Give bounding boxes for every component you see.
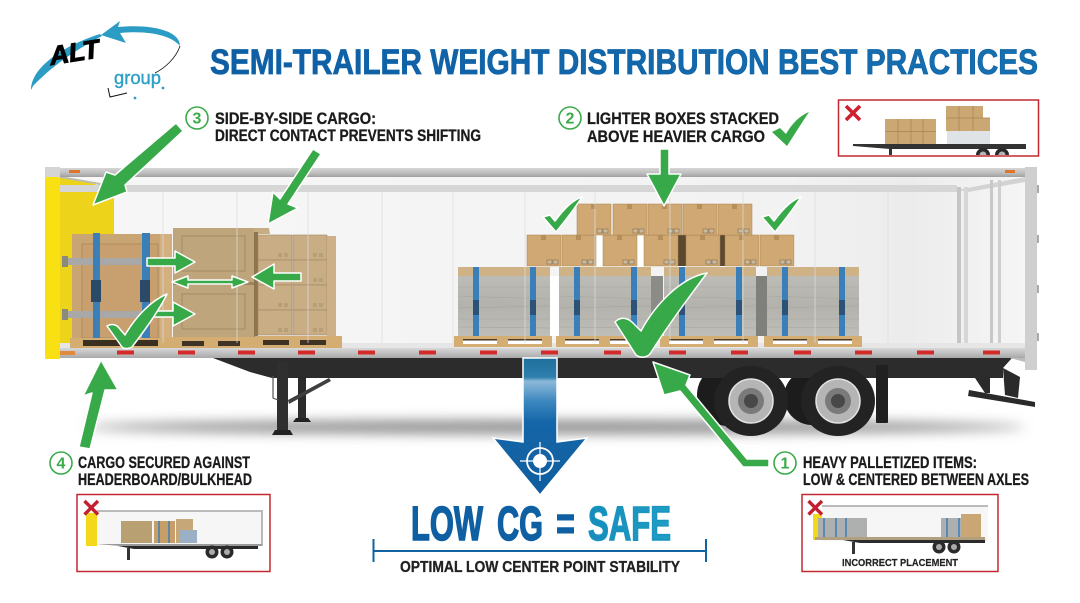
inset: incorrect placement, cargo off bulkhead	[77, 494, 270, 572]
logo: ALT group: group	[114, 68, 161, 88]
arrow: to upper boxes	[647, 149, 681, 206]
landing gear	[272, 362, 331, 435]
logo: ALT group: ALT	[46, 33, 103, 71]
callout 1: heavy palletized items	[774, 452, 1029, 489]
icon: target crosshair	[520, 442, 560, 481]
rear hidden wheels	[697, 364, 840, 426]
inset: incorrect flatbed loading	[838, 100, 1038, 156]
callout 2: lighter boxes	[559, 107, 779, 146]
icon: red X	[808, 501, 822, 514]
trailer deck with marker lights	[60, 343, 1025, 362]
callout 3: side-by-side cargo: DIRECT CONTACT PREVENTS SHIFTING	[215, 127, 481, 145]
icon: red X	[846, 106, 860, 120]
arrow: to headerboard from callout 4	[79, 360, 118, 449]
trailer dark chassis	[213, 358, 1012, 378]
trailer roof rails	[60, 168, 1025, 192]
left cargo: large cartons	[172, 228, 270, 348]
check: callout 2	[772, 112, 809, 146]
trailer interior wall	[60, 177, 1025, 347]
callout 2: lighter boxes: 2	[566, 110, 575, 128]
callout: low CG = safe: =	[556, 498, 575, 551]
callout: low CG = safe: CG	[497, 498, 543, 551]
left cargo: small carton stack	[255, 235, 342, 348]
bulkhead: yellow headerboard	[45, 167, 114, 359]
right cargo: heavy palletized blocks	[454, 267, 862, 347]
callout 2: lighter boxes: LIGHTER BOXES STACKED	[587, 110, 779, 128]
inset: incorrect placement, weight at ends: INCORRECT PLACEMENT	[842, 557, 959, 569]
rear support stand	[968, 368, 1035, 407]
ground shadow	[85, 420, 1025, 434]
arrow: low center of gravity	[493, 358, 587, 495]
callout 4: cargo secured: HEADERBOARD/BULKHEAD	[78, 471, 252, 489]
check: upper boxes left	[543, 197, 582, 232]
callout 4: cargo secured: CARGO SECURED AGAINST	[78, 454, 250, 472]
logo: ALT group	[31, 21, 180, 99]
callout 1: heavy palletized items: HEAVY PALLETIZED ITEMS:	[803, 454, 977, 472]
semi-trailer illustration	[45, 167, 1039, 436]
rear door frame	[957, 167, 1039, 370]
callout 3: side-by-side cargo: 3	[193, 110, 202, 128]
callout 3: side-by-side cargo: SIDE-BY-SIDE CARGO:	[215, 110, 376, 128]
arrow: to bulkhead	[93, 123, 183, 205]
callout 2: lighter boxes: ABOVE HEAVIER CARGO	[587, 128, 765, 146]
callout: low CG = safe: OPTIMAL LOW CENTER POINT STABILITY	[400, 559, 681, 576]
rear wheels and axles	[714, 365, 888, 436]
callout: low CG = safe: LOW	[411, 498, 483, 551]
callout: low CG = safe: SAFE	[588, 498, 671, 551]
callout 3: side-by-side cargo	[186, 107, 481, 145]
arrow: to pallets from callout 1	[653, 362, 769, 467]
icon: red X	[84, 501, 98, 514]
check: left cargo	[107, 294, 167, 348]
callout 4: cargo secured	[50, 452, 252, 489]
side-by-side contact arrows	[147, 251, 301, 326]
left cargo: strapped crate	[62, 233, 172, 348]
check: heavy pallets	[615, 273, 707, 357]
right cargo: lighter boxes stacked above	[527, 204, 795, 267]
callout: low CG = safe	[373, 498, 706, 576]
inset: incorrect placement, weight at ends	[802, 494, 998, 572]
arrow: to side-by-side cargo	[268, 149, 321, 224]
callout 1: heavy palletized items: 1	[781, 456, 790, 472]
callout 4: cargo secured: 4	[57, 456, 66, 472]
check: upper boxes right	[762, 197, 801, 232]
